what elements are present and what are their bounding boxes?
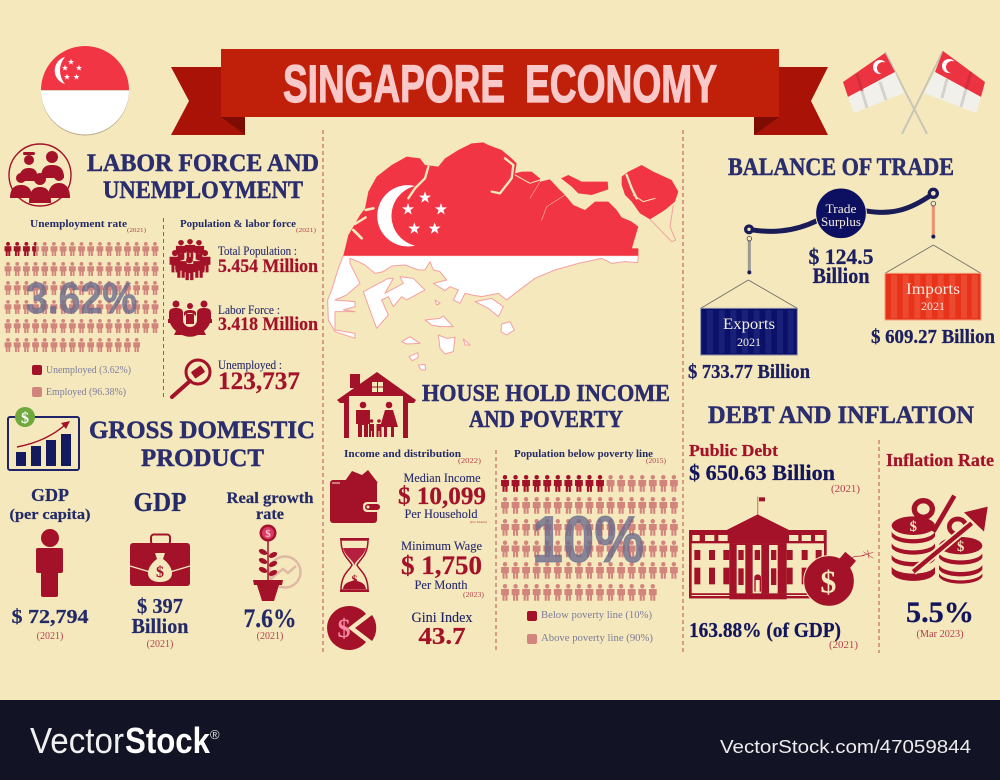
subheading: population below poverty line: (2015) — [646, 456, 666, 465]
icon: hourglass: $ — [352, 572, 358, 586]
subheading: population and labor force: (2021) — [296, 227, 316, 234]
footer logo: Stock — [125, 720, 211, 761]
stat: GDP per capita: GDP — [31, 485, 69, 505]
map: lower white half — [328, 256, 638, 370]
stat: public debt: $ 650.63 Billion — [689, 460, 835, 485]
stat: trade surplus value: Billion — [812, 263, 870, 288]
stat: real growth rate: Real growth — [226, 490, 314, 507]
stat: median income: Per Household — [404, 506, 478, 521]
stat: real growth rate: 7.6% — [244, 604, 296, 633]
trade surplus label — [821, 201, 861, 229]
icon: person — [36, 529, 63, 597]
stat: median income — [398, 470, 487, 524]
coin stacks — [892, 516, 982, 584]
bomb: $ — [820, 563, 836, 599]
legend: poverty: Above poverty line (90%) — [541, 633, 653, 644]
chart: poverty pictogram — [501, 475, 678, 601]
icon: money plant: $ — [265, 528, 271, 540]
stat: debt percent of GDP: (2021) — [829, 640, 858, 651]
value: 10%: 10% — [532, 502, 644, 576]
subheading: unemployment rate: (2021) — [127, 227, 146, 234]
subheading: population below poverty line: Population below poverty line — [514, 448, 653, 460]
stat: debt percent of GDP: 163.88% (of GDP) — [689, 618, 841, 642]
stat: median income: $ 10,099 — [398, 483, 486, 510]
icon: Singapore flag circle — [41, 46, 129, 136]
stat: GDP per capita: (per capita) — [10, 507, 90, 523]
stat: GDP per capita: $ 72,794 — [12, 606, 88, 628]
heading: gross domestic product — [89, 415, 315, 472]
heading: gross domestic product: GROSS DOMESTIC — [89, 415, 315, 444]
icon: magnifier — [172, 360, 210, 397]
footer logo — [30, 720, 220, 761]
title banner — [171, 49, 828, 135]
subheading: population and labor force — [180, 218, 316, 234]
subheading: population and labor force: Population & labor force — [180, 218, 296, 230]
stat: real growth rate — [226, 490, 314, 642]
stat: GDP per capita — [10, 485, 90, 642]
heading: household income and poverty: AND POVERTY — [469, 406, 623, 433]
stat: public debt — [689, 441, 860, 495]
icon: hourglass — [340, 539, 369, 591]
legend: poverty: Below poverty line (10%) — [541, 610, 652, 621]
subheading: income and distribution — [344, 448, 482, 465]
icon: money plant — [253, 524, 300, 601]
heading: gross domestic product: PRODUCT — [141, 443, 264, 472]
subheading: unemployment rate — [30, 218, 146, 234]
stat: total population: 5.454 Million — [218, 257, 319, 277]
icon: inflation coins and percent: $ — [910, 519, 917, 535]
subheading: population below poverty line — [514, 448, 666, 465]
heading: debt and inflation: DEBT AND INFLATION — [708, 400, 975, 429]
stat: gini index: 43.7 — [418, 624, 466, 650]
stat: labor force — [218, 302, 319, 335]
title: SINGAPORE — [283, 55, 505, 114]
icon: briefcase: $ — [156, 564, 164, 581]
icon: house with family — [337, 372, 416, 438]
footer logo: ® — [210, 727, 220, 742]
trade surplus label: Trade — [826, 201, 857, 216]
stat: GDP: Billion — [132, 614, 189, 638]
stat: unemployed: Unemployed : — [218, 357, 282, 372]
value: 3.62%: 3.62% — [26, 274, 137, 323]
heading: balance of trade: BALANCE OF TRADE — [728, 154, 954, 181]
scale beam — [748, 193, 933, 231]
map: Singapore in flag colours — [328, 142, 678, 370]
imports label: 2021 — [921, 299, 945, 313]
stat: GDP: GDP — [134, 487, 186, 517]
bomb — [804, 550, 873, 606]
subheading: income and distribution: Income and distribution — [344, 448, 461, 460]
stat: minimum wage: Per Month — [414, 577, 468, 592]
title: ECONOMY — [525, 55, 717, 114]
stat: labor force: 3.418 Million — [218, 315, 319, 335]
stat: trade surplus value: $ 124.5 — [808, 244, 874, 269]
stat: inflation value: (Mar 2023) — [916, 629, 964, 640]
imports label — [906, 281, 960, 313]
stat: GDP: (2021) — [147, 639, 173, 650]
imports hanger — [885, 201, 981, 320]
stat: GDP: $ 397 — [137, 594, 183, 618]
icon: labor force workers — [9, 144, 71, 206]
subheading: unemployment rate: Unemployment rate — [30, 218, 127, 230]
heading: household income and poverty — [422, 380, 670, 433]
stat: gini index: Gini Index — [412, 610, 473, 626]
footer logo: Vector — [30, 720, 124, 761]
map: crescent and stars — [377, 185, 447, 246]
icon: gini pie with dollar — [327, 606, 376, 650]
icon: government building with debt bomb — [689, 497, 873, 606]
stat: public debt: (2021) — [831, 484, 860, 495]
exports label: 2021 — [737, 335, 761, 349]
legend: poverty — [527, 610, 653, 644]
stat: GDP — [130, 487, 190, 650]
stat: unemployed: 123,737 — [218, 368, 300, 395]
stat: real growth rate: rate — [256, 506, 284, 523]
percent symbol — [914, 496, 966, 534]
icon: briefcase — [130, 534, 190, 586]
column dividers — [164, 130, 879, 655]
icon: GDP chart — [8, 407, 79, 470]
stat: total population — [218, 243, 319, 277]
diagram: trade scale with containers — [701, 188, 981, 355]
footer bar — [0, 700, 1000, 780]
footer image id: VectorStock.com/47059844 — [720, 737, 971, 757]
stat: GDP per capita: (2021) — [37, 631, 63, 642]
stat: median income: (Per Month) — [470, 520, 487, 524]
stat: labor force: Labor Force : — [218, 302, 280, 317]
icon: gini pie with dollar: $ — [338, 614, 350, 643]
stat: median income: Median Income — [404, 470, 481, 485]
heading: labor force — [87, 148, 319, 204]
heading: household income and poverty: HOUSE HOLD INCOME — [422, 380, 670, 407]
heading: labor force: LABOR FORCE AND — [87, 148, 319, 177]
subheading: income and distribution: (2022) — [458, 456, 482, 465]
stat: total population: Total Population : — [218, 243, 297, 258]
stat: minimum wage: (2023) — [463, 590, 485, 599]
heading: labor force: UNEMPLOYMENT — [103, 175, 303, 204]
arrow — [913, 507, 988, 572]
stat: gini index — [412, 610, 473, 650]
stat: minimum wage: $ 1,750 — [401, 551, 482, 580]
stat: minimum wage — [401, 538, 485, 599]
icon: inflation coins and percent — [892, 496, 988, 584]
exports label: Exports — [723, 316, 775, 333]
chart: unemployment pictogram — [5, 242, 158, 352]
legend: unemployment: Employed (96.38%) — [46, 387, 126, 398]
stat: minimum wage: Minimum Wage — [401, 538, 482, 553]
heading: inflation rate: Inflation Rate — [886, 450, 994, 470]
icon: GDP chart: $ — [21, 410, 29, 427]
stat: real growth rate: (2021) — [257, 631, 283, 642]
icon: population crowd — [170, 239, 210, 280]
icon: inflation coins and percent: $ — [957, 539, 964, 555]
legend: unemployment: Unemployed (3.62%) — [46, 365, 131, 376]
stat: trade surplus value — [808, 244, 874, 288]
icon: labor force gear — [168, 300, 212, 337]
map: upper red half — [343, 142, 678, 256]
stat: public debt: Public Debt — [689, 441, 778, 460]
stat: imports value: $ 609.27 Billion — [871, 327, 995, 348]
trade surplus label: Surplus — [821, 214, 861, 229]
icon: crossed flags — [843, 51, 985, 134]
stat: inflation value: 5.5% — [906, 596, 974, 629]
icon: wallet — [330, 470, 380, 523]
legend: unemployment — [32, 365, 131, 398]
stat: exports value: $ 733.77 Billion — [688, 362, 810, 383]
exports label — [723, 316, 775, 349]
exports hanger — [701, 236, 797, 355]
imports label: Imports — [906, 281, 960, 298]
